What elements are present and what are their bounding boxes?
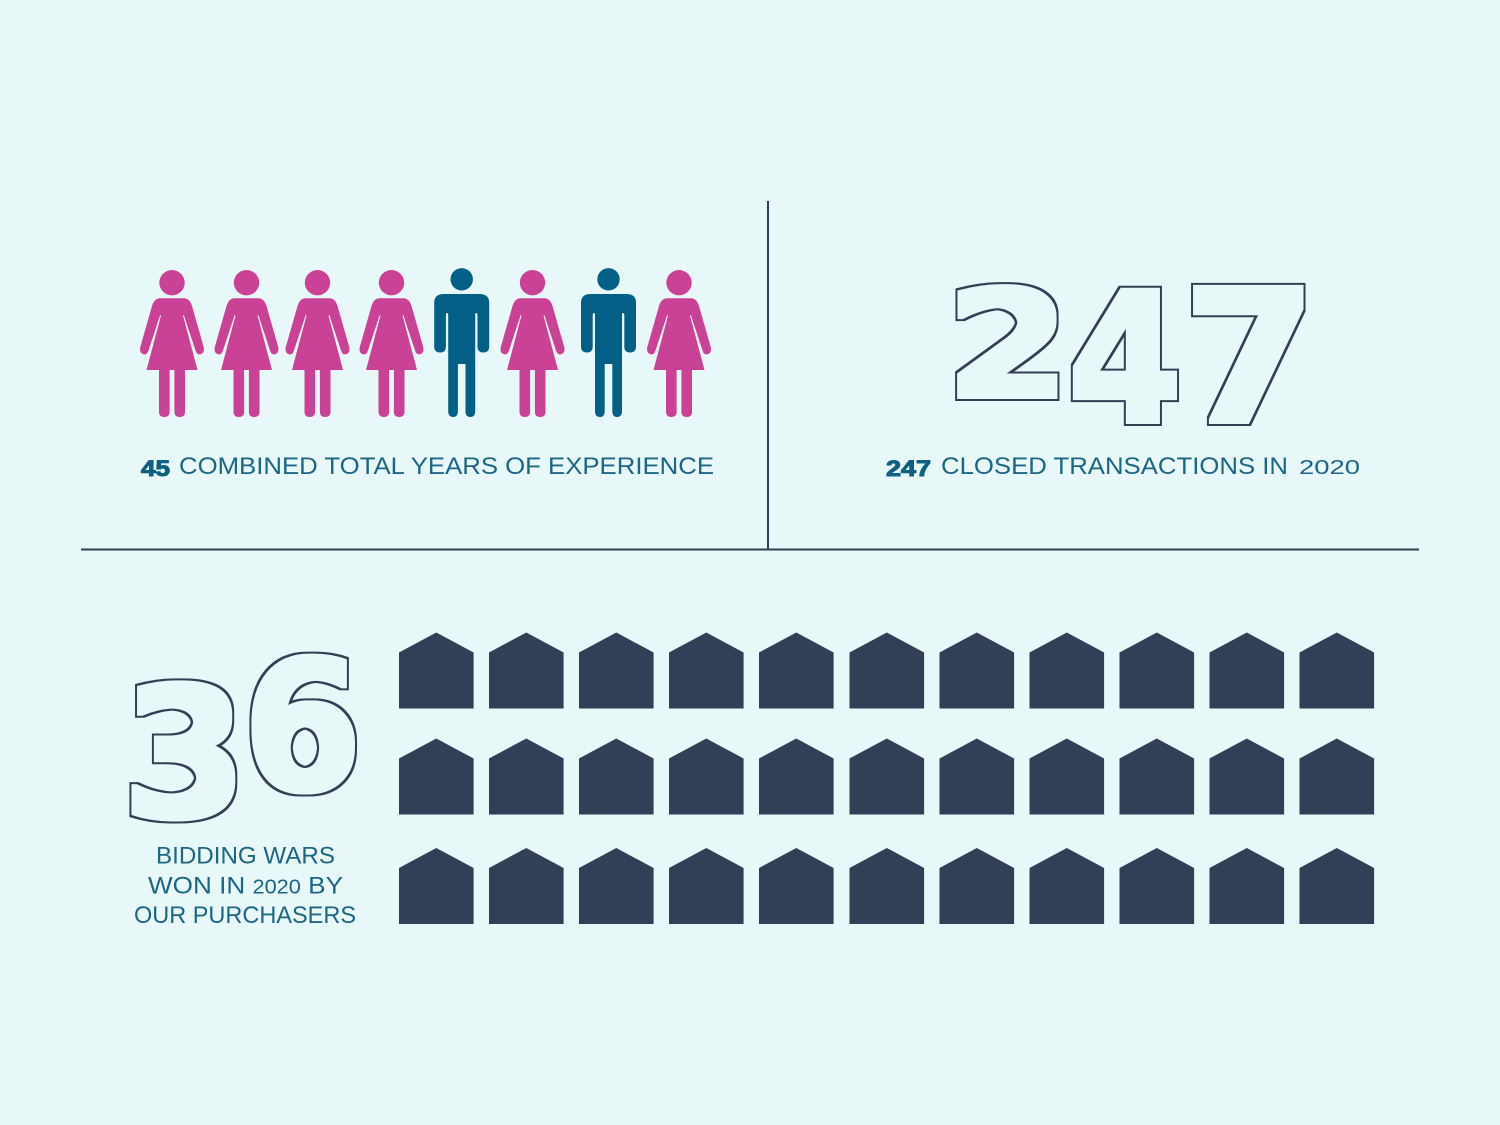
house grid: row 3 bbox=[399, 848, 1374, 924]
caption: bidding wars won in 2020 by our purchasers: OUR PURCHASERS bbox=[134, 902, 356, 929]
icon: woman 6 bbox=[647, 270, 711, 417]
icon: woman 4 bbox=[360, 270, 423, 417]
caption: closed transactions in 2020: 2020 bbox=[1299, 457, 1360, 479]
caption: closed transactions in 2020: 247 bbox=[886, 456, 931, 481]
panel: years of experience bbox=[140, 268, 714, 481]
house grid: row 1 bbox=[399, 632, 1374, 708]
caption: bidding wars won in 2020 by our purchasers: WON IN 2020 BY bbox=[148, 872, 343, 900]
caption: closed transactions in 2020: CLOSED TRANSACTIONS IN bbox=[941, 453, 1288, 480]
caption: closed transactions in 2020 bbox=[886, 453, 1360, 481]
panel: closed transactions bbox=[886, 251, 1360, 481]
icon: man 1 bbox=[434, 268, 489, 417]
big outlined number 247: 7 bbox=[1183, 251, 1316, 466]
big outlined number 247: 2 bbox=[945, 259, 1071, 432]
caption: bidding wars won in 2020 by our purchasers bbox=[134, 842, 356, 929]
icon: woman 1 bbox=[140, 270, 204, 417]
pictogram row: eight team members bbox=[140, 268, 711, 417]
big outlined number 36: 6 bbox=[243, 623, 362, 833]
icon: woman 3 bbox=[286, 270, 349, 417]
caption: bidding wars won in 2020 by our purchasers: BIDDING WARS bbox=[156, 842, 335, 870]
panel: bidding wars bbox=[122, 623, 1374, 929]
big outlined number 36: 3 bbox=[122, 650, 247, 859]
big outlined number 36 bbox=[122, 623, 362, 860]
caption: combined years of experience: 45 bbox=[141, 456, 170, 481]
icon: woman 2 bbox=[215, 270, 278, 417]
big outlined number 247: 4 bbox=[1068, 254, 1182, 464]
big outlined number 247 bbox=[945, 251, 1316, 466]
icon: woman 5 bbox=[501, 270, 564, 417]
house grid: row 2 bbox=[399, 738, 1374, 814]
icon: man 2 bbox=[581, 268, 636, 417]
caption: combined years of experience: COMBINED TOTAL YEARS OF EXPERIENCE bbox=[179, 453, 714, 480]
